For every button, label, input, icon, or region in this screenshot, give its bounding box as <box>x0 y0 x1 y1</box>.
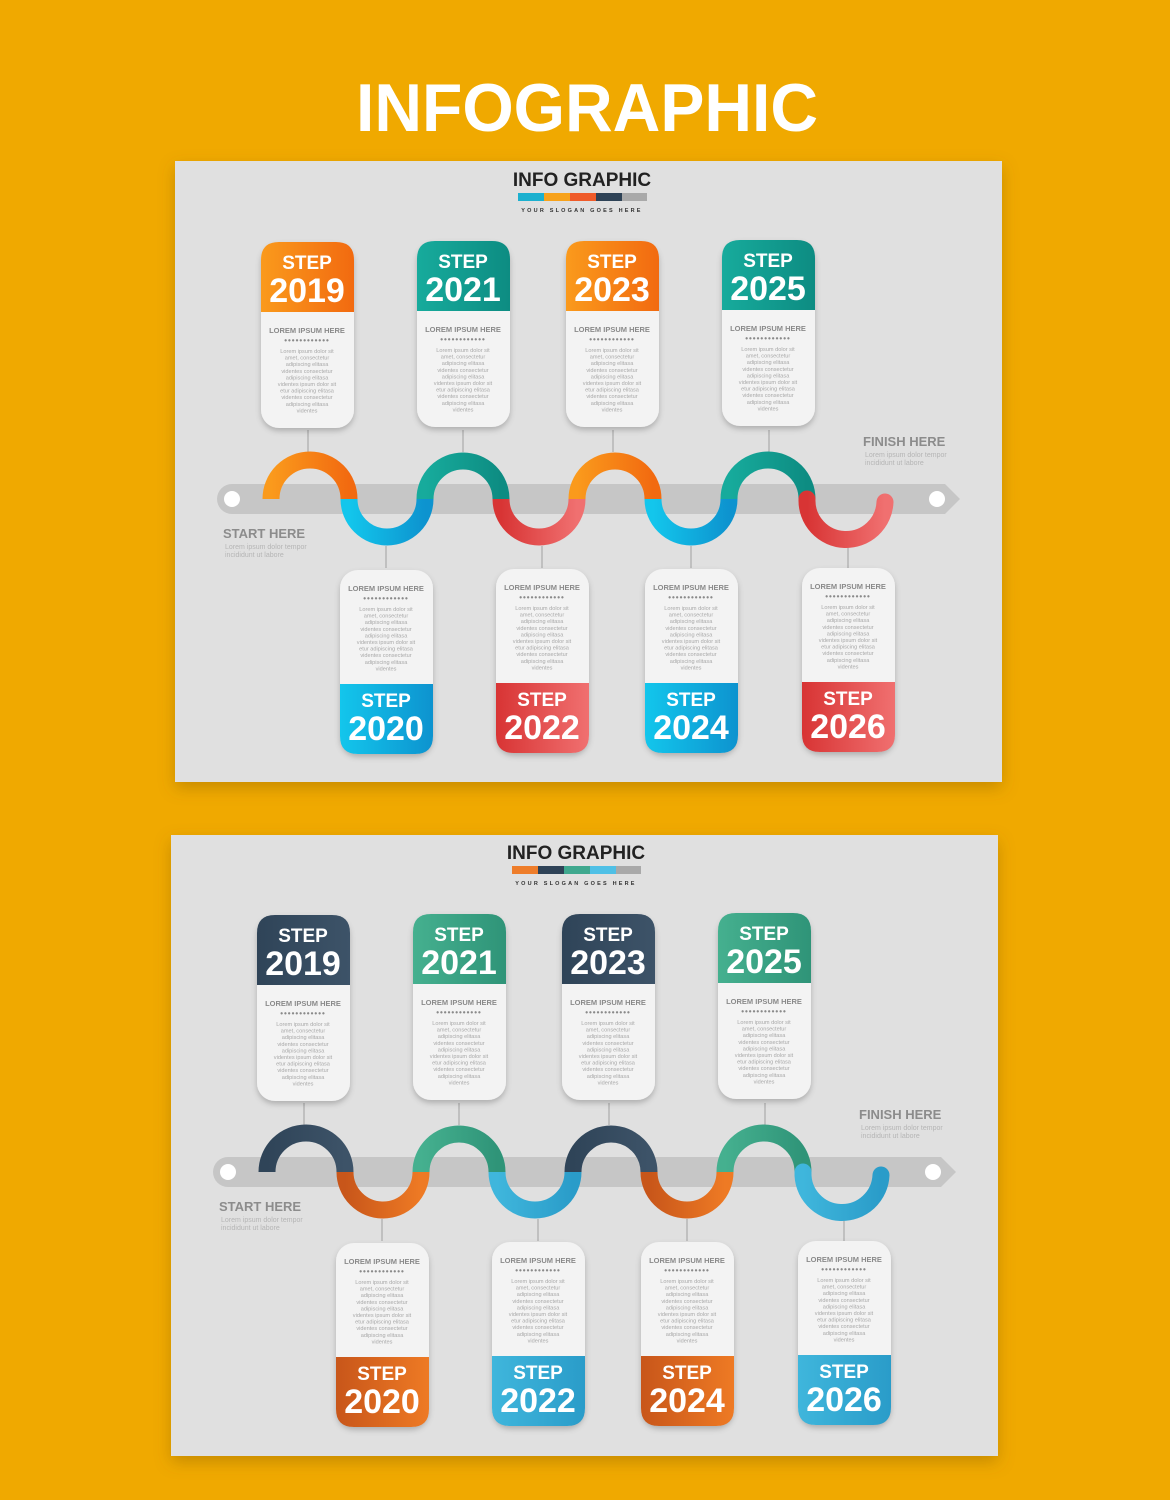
card: step 2019: videntes consectetur <box>277 1068 329 1074</box>
card: step 2023: Lorem ipsum dolor sit <box>585 348 639 354</box>
card: step 2019: Lorem ipsum dolor sit <box>280 349 334 355</box>
card: step 2021: adipiscing elitasa <box>438 1074 481 1080</box>
card: step 2024: adipiscing elitasa <box>670 632 713 638</box>
card: step 2022: adipiscing elitasa <box>521 659 564 665</box>
card: step 2024: STEP <box>662 1363 712 1384</box>
card: step 2025: videntes consectetur <box>738 1040 790 1046</box>
card: step 2019: •••••••••••• <box>280 1009 326 1018</box>
card: step 2022: adipiscing elitasa <box>517 1292 560 1298</box>
card: step 2022 <box>496 569 589 753</box>
card: step 2023: etur adipiscing elitasa <box>581 1061 636 1067</box>
card: step 2022: adipiscing elitasa <box>517 1332 560 1338</box>
card: step 2022: adipiscing elitasa <box>521 632 564 638</box>
card: step 2025: LOREM IPSUM HERE <box>730 324 806 333</box>
card: step 2024: adipiscing elitasa <box>666 1305 709 1311</box>
card: step 2022: videntes ipsum dolor sit <box>509 1312 568 1318</box>
header logo: YOUR SLOGAN GOES HERE <box>515 881 637 887</box>
start label: incididunt ut labore <box>225 552 284 559</box>
card: step 2020: •••••••••••• <box>363 594 409 603</box>
card: step 2026: Lorem ipsum dolor sit <box>817 1278 871 1284</box>
card: step 2023: videntes ipsum dolor sit <box>583 381 642 387</box>
header logo: INFO GRAPHIC <box>507 843 645 864</box>
card: step 2024: videntes consectetur <box>661 1325 713 1331</box>
card: step 2023: •••••••••••• <box>589 335 635 344</box>
card: step 2023: amet, consectetur <box>590 355 634 361</box>
card: step 2026: adipiscing elitasa <box>823 1304 866 1310</box>
card: step 2019: amet, consectetur <box>285 356 329 362</box>
card: step 2026 <box>798 1241 891 1425</box>
card: step 2020: videntes consectetur <box>356 1300 408 1306</box>
card: step 2022: LOREM IPSUM HERE <box>500 1256 576 1265</box>
finish label: Lorem ipsum dolor tempor <box>861 1125 943 1132</box>
card: step 2021: videntes consectetur <box>433 1067 485 1073</box>
card: step 2020: adipiscing elitasa <box>361 1333 404 1339</box>
card: step 2021: adipiscing elitasa <box>442 374 485 380</box>
card: step 2025: amet, consectetur <box>742 1027 786 1033</box>
card: step 2025: STEP <box>743 251 793 272</box>
card: step 2020: Lorem ipsum dolor sit <box>359 607 413 613</box>
card: step 2020: LOREM IPSUM HERE <box>344 1257 420 1266</box>
card: step 2020: amet, consectetur <box>364 614 408 620</box>
card: step 2022: Lorem ipsum dolor sit <box>511 1279 565 1285</box>
card: step 2024: •••••••••••• <box>664 1266 710 1275</box>
card: step 2022: videntes consectetur <box>516 652 568 658</box>
card: step 2020: videntes consectetur <box>360 627 412 633</box>
card: step 2020: 2020 <box>348 710 424 748</box>
card: step 2019: adipiscing elitasa <box>286 375 329 381</box>
card: step 2020: •••••••••••• <box>359 1267 405 1276</box>
card: step 2020: STEP <box>361 691 411 712</box>
card: step 2026: Lorem ipsum dolor sit <box>821 605 875 611</box>
card: step 2019: videntes consectetur <box>281 369 333 375</box>
finish label: Lorem ipsum dolor tempor <box>865 452 947 459</box>
connector lines <box>308 430 848 568</box>
card: step 2025: STEP <box>739 924 789 945</box>
card: step 2025: etur adipiscing elitasa <box>737 1060 792 1066</box>
card: step 2025: adipiscing elitasa <box>747 400 790 406</box>
card: step 2021: STEP <box>438 252 488 273</box>
card: step 2026: LOREM IPSUM HERE <box>806 1255 882 1264</box>
card: step 2021: adipiscing elitasa <box>442 361 485 367</box>
card: step 2023: LOREM IPSUM HERE <box>570 998 646 1007</box>
card: step 2020: videntes consectetur <box>360 653 412 659</box>
card: step 2025: 2025 <box>730 270 806 308</box>
card: step 2025: adipiscing elitasa <box>747 360 790 366</box>
card: step 2024: LOREM IPSUM HERE <box>653 583 729 592</box>
card: step 2022: •••••••••••• <box>515 1266 561 1275</box>
card: step 2025: adipiscing elitasa <box>743 1073 786 1079</box>
card: step 2024: videntes <box>681 665 702 671</box>
card: step 2026: videntes <box>834 1337 855 1343</box>
card: step 2024: Lorem ipsum dolor sit <box>660 1279 714 1285</box>
card: step 2020 <box>336 1243 429 1427</box>
card: step 2024: STEP <box>666 690 716 711</box>
card: step 2021: videntes consectetur <box>433 1041 485 1047</box>
card: step 2020: videntes consectetur <box>356 1326 408 1332</box>
card: step 2023 <box>566 241 659 427</box>
card: step 2022: etur adipiscing elitasa <box>511 1319 566 1325</box>
card: step 2020: etur adipiscing elitasa <box>359 647 414 653</box>
card: step 2019: Lorem ipsum dolor sit <box>276 1022 330 1028</box>
card: step 2025 <box>718 913 811 1099</box>
card: step 2022: videntes <box>532 665 553 671</box>
card: step 2021 <box>417 241 510 427</box>
card: step 2020: 2020 <box>344 1383 420 1421</box>
card: step 2019: adipiscing elitasa <box>282 1035 325 1041</box>
card: step 2024: LOREM IPSUM HERE <box>649 1256 725 1265</box>
card: step 2019: videntes consectetur <box>277 1042 329 1048</box>
card: step 2023: videntes consectetur <box>586 368 638 374</box>
header logo <box>507 843 645 887</box>
card: step 2019: adipiscing elitasa <box>286 402 329 408</box>
card: step 2019: amet, consectetur <box>281 1029 325 1035</box>
start label: Lorem ipsum dolor tempor <box>221 1217 303 1224</box>
card: step 2021: videntes consectetur <box>437 368 489 374</box>
card: step 2026: adipiscing elitasa <box>827 618 870 624</box>
card: step 2020: adipiscing elitasa <box>365 633 408 639</box>
card: step 2021: •••••••••••• <box>436 1008 482 1017</box>
card: step 2023: •••••••••••• <box>585 1008 631 1017</box>
card: step 2023: adipiscing elitasa <box>591 374 634 380</box>
card: step 2022: LOREM IPSUM HERE <box>504 583 580 592</box>
card: step 2024: videntes consectetur <box>661 1299 713 1305</box>
card: step 2023: videntes <box>602 407 623 413</box>
connector lines <box>304 1103 844 1241</box>
start label <box>223 526 307 559</box>
title: INFOGRAPHIC <box>356 70 818 146</box>
card: step 2021: STEP <box>434 925 484 946</box>
card: step 2019: etur adipiscing elitasa <box>276 1062 331 1068</box>
card: step 2019: videntes <box>297 408 318 414</box>
card: step 2024: videntes ipsum dolor sit <box>662 639 721 645</box>
header logo: INFO GRAPHIC <box>513 170 651 191</box>
card: step 2021: amet, consectetur <box>441 355 485 361</box>
card: step 2020: videntes <box>376 666 397 672</box>
card: step 2023: STEP <box>583 925 633 946</box>
card: step 2020: videntes ipsum dolor sit <box>353 1313 412 1319</box>
card: step 2026: adipiscing elitasa <box>823 1331 866 1337</box>
card: step 2026: videntes ipsum dolor sit <box>819 638 878 644</box>
card: step 2021: videntes ipsum dolor sit <box>430 1054 489 1060</box>
card: step 2026: LOREM IPSUM HERE <box>810 582 886 591</box>
card: step 2021: videntes ipsum dolor sit <box>434 381 493 387</box>
card: step 2023: 2023 <box>574 271 650 309</box>
card: step 2024: adipiscing elitasa <box>670 619 713 625</box>
card: step 2024: •••••••••••• <box>668 593 714 602</box>
card: step 2022: videntes ipsum dolor sit <box>513 639 572 645</box>
card: step 2025: videntes consectetur <box>742 367 794 373</box>
card: step 2021: etur adipiscing elitasa <box>432 1061 487 1067</box>
card: step 2026: adipiscing elitasa <box>827 631 870 637</box>
card: step 2019: •••••••••••• <box>284 336 330 345</box>
card: step 2019: 2019 <box>269 272 345 310</box>
card: step 2021: adipiscing elitasa <box>438 1047 481 1053</box>
card: step 2019 <box>261 242 354 428</box>
panel: timeline version 1 <box>175 161 1002 782</box>
card: step 2019 <box>257 915 350 1101</box>
card: step 2022: amet, consectetur <box>516 1286 560 1292</box>
card: step 2022: •••••••••••• <box>519 593 565 602</box>
card: step 2020 <box>340 570 433 754</box>
card: step 2019: LOREM IPSUM HERE <box>265 999 341 1008</box>
card: step 2024 <box>645 569 738 753</box>
card: step 2021: amet, consectetur <box>437 1028 481 1034</box>
card: step 2022: 2022 <box>504 709 580 747</box>
card: step 2023: amet, consectetur <box>586 1028 630 1034</box>
card: step 2020: videntes ipsum dolor sit <box>357 640 416 646</box>
finish label: incididunt ut labore <box>865 460 924 467</box>
card: step 2026: adipiscing elitasa <box>827 658 870 664</box>
finish label: FINISH HERE <box>863 434 946 449</box>
card: step 2022: adipiscing elitasa <box>521 619 564 625</box>
card: step 2019: adipiscing elitasa <box>282 1075 325 1081</box>
finish label <box>863 434 947 467</box>
card: step 2025: videntes ipsum dolor sit <box>739 380 798 386</box>
card: step 2021: videntes consectetur <box>437 394 489 400</box>
card: step 2023: STEP <box>587 252 637 273</box>
card: step 2026: etur adipiscing elitasa <box>821 645 876 651</box>
card: step 2026: STEP <box>823 689 873 710</box>
card: step 2020: etur adipiscing elitasa <box>355 1320 410 1326</box>
card: step 2024: videntes consectetur <box>665 626 717 632</box>
card: step 2024: etur adipiscing elitasa <box>664 646 719 652</box>
card: step 2023: adipiscing elitasa <box>587 1074 630 1080</box>
card: step 2024: videntes ipsum dolor sit <box>658 1312 717 1318</box>
card: step 2024: 2024 <box>653 709 729 747</box>
card: step 2020: Lorem ipsum dolor sit <box>355 1280 409 1286</box>
header logo <box>513 170 651 214</box>
card: step 2021 <box>413 914 506 1100</box>
start label: START HERE <box>219 1199 301 1214</box>
card: step 2023: adipiscing elitasa <box>587 1034 630 1040</box>
card: step 2025: Lorem ipsum dolor sit <box>737 1020 791 1026</box>
card: step 2021: LOREM IPSUM HERE <box>425 325 501 334</box>
finish label <box>859 1107 943 1140</box>
card: step 2025: adipiscing elitasa <box>747 373 790 379</box>
card: step 2019: videntes ipsum dolor sit <box>274 1055 333 1061</box>
card: step 2023: etur adipiscing elitasa <box>585 388 640 394</box>
card: step 2021: 2021 <box>421 944 497 982</box>
card: step 2023: videntes consectetur <box>582 1067 634 1073</box>
card: step 2022: Lorem ipsum dolor sit <box>515 606 569 612</box>
card: step 2023: videntes consectetur <box>586 394 638 400</box>
card: step 2024: amet, consectetur <box>665 1286 709 1292</box>
card: step 2026: amet, consectetur <box>822 1285 866 1291</box>
card: step 2024: etur adipiscing elitasa <box>660 1319 715 1325</box>
card: step 2021: Lorem ipsum dolor sit <box>436 348 490 354</box>
card: step 2020: adipiscing elitasa <box>361 1293 404 1299</box>
start label <box>219 1199 303 1232</box>
card: step 2022: STEP <box>513 1363 563 1384</box>
card: step 2021: videntes <box>449 1080 470 1086</box>
card: step 2024: adipiscing elitasa <box>670 659 713 665</box>
card: step 2021: Lorem ipsum dolor sit <box>432 1021 486 1027</box>
card: step 2024: adipiscing elitasa <box>666 1332 709 1338</box>
card: step 2026: 2026 <box>806 1381 882 1419</box>
card: step 2025: LOREM IPSUM HERE <box>726 997 802 1006</box>
card: step 2023: adipiscing elitasa <box>591 361 634 367</box>
card: step 2023 <box>562 914 655 1100</box>
card: step 2024: 2024 <box>649 1382 725 1420</box>
card: step 2019: videntes ipsum dolor sit <box>278 382 337 388</box>
card: step 2023: Lorem ipsum dolor sit <box>581 1021 635 1027</box>
card: step 2020: STEP <box>357 1364 407 1385</box>
card: step 2025: •••••••••••• <box>741 1007 787 1016</box>
card: step 2022: adipiscing elitasa <box>517 1305 560 1311</box>
card: step 2021: LOREM IPSUM HERE <box>421 998 497 1007</box>
card: step 2026: •••••••••••• <box>821 1265 867 1274</box>
card: step 2025: 2025 <box>726 943 802 981</box>
card: step 2022: etur adipiscing elitasa <box>515 646 570 652</box>
card: step 2026: amet, consectetur <box>826 612 870 618</box>
header logo: YOUR SLOGAN GOES HERE <box>521 208 643 214</box>
card: step 2019: 2019 <box>265 945 341 983</box>
card: step 2023: adipiscing elitasa <box>587 1047 630 1053</box>
card: step 2022: STEP <box>517 690 567 711</box>
start label: START HERE <box>223 526 305 541</box>
card: step 2022 <box>492 1242 585 1426</box>
panel: timeline version 2 <box>171 835 998 1456</box>
card: step 2025: videntes ipsum dolor sit <box>735 1053 794 1059</box>
card: step 2021: 2021 <box>425 271 501 309</box>
card: step 2020: videntes <box>372 1339 393 1345</box>
card: step 2023: videntes ipsum dolor sit <box>579 1054 638 1060</box>
card: step 2026: videntes ipsum dolor sit <box>815 1311 874 1317</box>
card: step 2025: •••••••••••• <box>745 334 791 343</box>
card: step 2026 <box>802 568 895 752</box>
finish label: incididunt ut labore <box>861 1133 920 1140</box>
card: step 2020: amet, consectetur <box>360 1287 404 1293</box>
finish label: FINISH HERE <box>859 1107 942 1122</box>
card: step 2019: etur adipiscing elitasa <box>280 389 335 395</box>
wave path <box>271 460 885 539</box>
card: step 2023: videntes <box>598 1080 619 1086</box>
card: step 2025: videntes consectetur <box>738 1066 790 1072</box>
card: step 2022: 2022 <box>500 1382 576 1420</box>
card: step 2020: adipiscing elitasa <box>365 620 408 626</box>
timeline bar <box>213 1157 956 1187</box>
card: step 2026: STEP <box>819 1362 869 1383</box>
card: step 2026: videntes consectetur <box>818 1298 870 1304</box>
card: step 2019: STEP <box>282 253 332 274</box>
card: step 2025: videntes consectetur <box>742 393 794 399</box>
card: step 2024: adipiscing elitasa <box>666 1292 709 1298</box>
card: step 2025: adipiscing elitasa <box>743 1046 786 1052</box>
card: step 2020: adipiscing elitasa <box>361 1306 404 1312</box>
card: step 2026: •••••••••••• <box>825 592 871 601</box>
card: step 2022: videntes consectetur <box>512 1299 564 1305</box>
card: step 2022: amet, consectetur <box>520 613 564 619</box>
card: step 2021: etur adipiscing elitasa <box>436 388 491 394</box>
wave path <box>267 1133 881 1212</box>
card: step 2020: LOREM IPSUM HERE <box>348 584 424 593</box>
start label: incididunt ut labore <box>221 1225 280 1232</box>
card: step 2023: videntes consectetur <box>582 1041 634 1047</box>
card: step 2019: adipiscing elitasa <box>282 1048 325 1054</box>
card: step 2024: videntes consectetur <box>665 652 717 658</box>
card: step 2022: videntes consectetur <box>516 626 568 632</box>
card: step 2023: LOREM IPSUM HERE <box>574 325 650 334</box>
card: step 2020: adipiscing elitasa <box>365 660 408 666</box>
card: step 2026: 2026 <box>810 708 886 746</box>
start label: Lorem ipsum dolor tempor <box>225 544 307 551</box>
card: step 2024: Lorem ipsum dolor sit <box>664 606 718 612</box>
card: step 2026: videntes consectetur <box>818 1324 870 1330</box>
card: step 2019: adipiscing elitasa <box>286 362 329 368</box>
card: step 2025: adipiscing elitasa <box>743 1033 786 1039</box>
card: step 2025: amet, consectetur <box>746 354 790 360</box>
timeline bar <box>217 484 960 514</box>
card: step 2022: videntes <box>528 1338 549 1344</box>
card: step 2023: adipiscing elitasa <box>591 401 634 407</box>
card: step 2025: etur adipiscing elitasa <box>741 387 796 393</box>
card: step 2026: adipiscing elitasa <box>823 1291 866 1297</box>
card: step 2026: etur adipiscing elitasa <box>817 1318 872 1324</box>
card: step 2024: amet, consectetur <box>669 613 713 619</box>
card: step 2019: videntes consectetur <box>281 395 333 401</box>
card: step 2025 <box>722 240 815 426</box>
card: step 2021: videntes <box>453 407 474 413</box>
card: step 2024: videntes <box>677 1338 698 1344</box>
card: step 2023: 2023 <box>570 944 646 982</box>
card: step 2026: videntes consectetur <box>822 651 874 657</box>
card: step 2025: Lorem ipsum dolor sit <box>741 347 795 353</box>
card: step 2026: videntes <box>838 664 859 670</box>
card: step 2024 <box>641 1242 734 1426</box>
card: step 2021: adipiscing elitasa <box>438 1034 481 1040</box>
card: step 2019: videntes <box>293 1081 314 1087</box>
card: step 2021: adipiscing elitasa <box>442 401 485 407</box>
card: step 2025: videntes <box>758 406 779 412</box>
card: step 2019: LOREM IPSUM HERE <box>269 326 345 335</box>
card: step 2021: •••••••••••• <box>440 335 486 344</box>
card: step 2025: videntes <box>754 1079 775 1085</box>
card: step 2022: videntes consectetur <box>512 1325 564 1331</box>
card: step 2026: videntes consectetur <box>822 625 874 631</box>
card: step 2019: STEP <box>278 926 328 947</box>
